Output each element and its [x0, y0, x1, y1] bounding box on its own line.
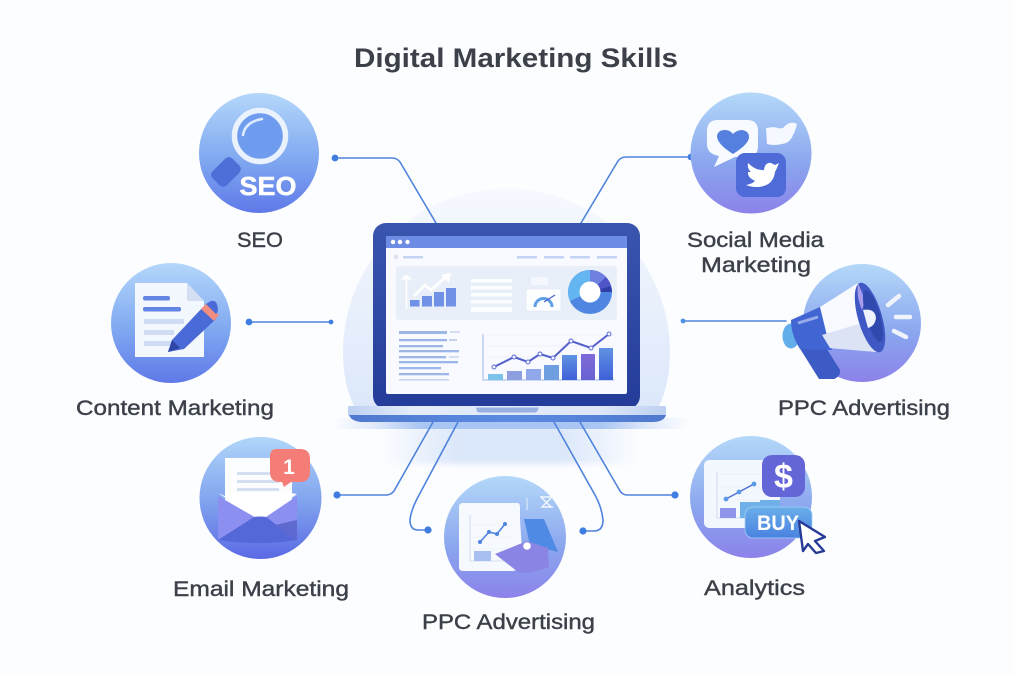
- laptop screen: [386, 236, 627, 394]
- connector: PPC Advertising right: [681, 319, 786, 323]
- dashboard top panel: [396, 266, 617, 320]
- label: Social Media Marketing: Marketing: [701, 254, 811, 277]
- megaphone handle: [799, 346, 840, 379]
- connector: PPC Advertising bottom right: [554, 422, 603, 535]
- twitter tile: [736, 153, 786, 197]
- small bird: [766, 123, 797, 145]
- megaphone body: [791, 307, 832, 350]
- label: SEO: SEO: [237, 229, 283, 252]
- nav items: [394, 255, 617, 259]
- laptop halo: [332, 188, 690, 464]
- browser bar: [386, 236, 627, 248]
- gauge card: [526, 277, 561, 311]
- cursor: [799, 521, 825, 553]
- label: Email Marketing: Email Marketing: [173, 578, 349, 601]
- donut chart: [568, 270, 612, 314]
- connector: SEO: [332, 155, 436, 223]
- megaphone cone: [820, 283, 877, 352]
- laptop: [348, 223, 666, 422]
- dollar tile: $: [774, 458, 793, 496]
- icon: email envelope: [200, 437, 322, 559]
- label: PPC Advertising bottom: PPC Advertising: [422, 611, 595, 634]
- notification badge: 1: [283, 456, 295, 479]
- laptop body: [373, 223, 640, 409]
- label: Analytics: Analytics: [704, 577, 805, 600]
- speech bubble heart: [707, 120, 758, 167]
- icon: social media: [690, 92, 812, 214]
- label: Social Media Marketing: [687, 229, 824, 277]
- connector: Social Media: [581, 154, 694, 223]
- megaphone rim: [849, 280, 891, 355]
- icon: megaphone: [782, 264, 921, 382]
- connector: Analytics: [580, 422, 679, 499]
- icon: SEO magnifier: SEO: [240, 171, 296, 201]
- megaphone tail: [782, 324, 800, 348]
- main chart: [483, 332, 614, 380]
- text lines: [471, 279, 512, 312]
- icon: content document and pencil: [111, 263, 231, 383]
- list lines: [399, 331, 460, 380]
- label: Content Marketing: Content Marketing: [76, 397, 274, 420]
- label: PPC Advertising right: PPC Advertising: [778, 397, 950, 420]
- small bar chart with arrow: [402, 273, 456, 309]
- buy button: BUY: [757, 512, 799, 535]
- connector: PPC Advertising bottom left: [410, 422, 458, 534]
- icon: PPC chart bottom: [444, 476, 566, 598]
- connector: Email Marketing: [333, 422, 433, 499]
- label: Social Media Marketing: Social Media: [687, 229, 824, 252]
- icon: analytics buy button: [690, 436, 825, 558]
- laptop base: [348, 406, 666, 422]
- icon: SEO magnifier: [199, 93, 319, 213]
- connector: Content Marketing: [246, 319, 333, 325]
- title: Digital Marketing Skills: [354, 43, 678, 73]
